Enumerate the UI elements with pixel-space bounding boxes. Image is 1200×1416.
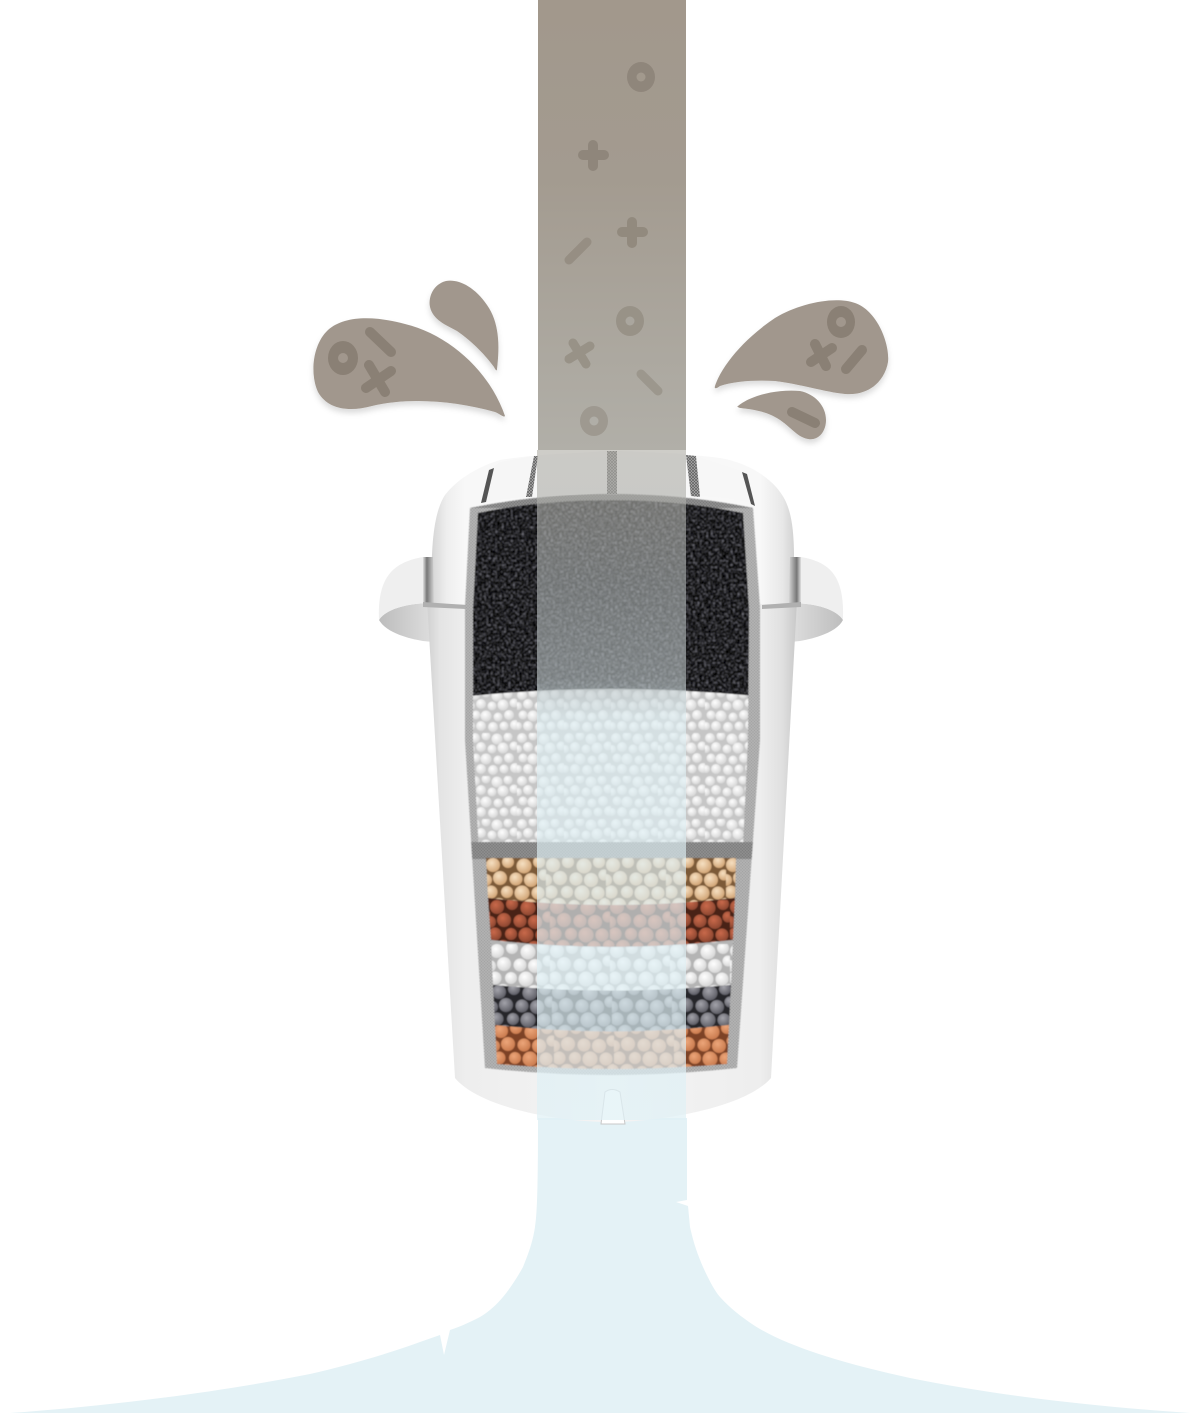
layer: white beads [491,940,733,990]
layer: orange beads [495,1025,729,1069]
incoming water overlay through cartridge [537,450,686,1120]
icon: minus contaminant [370,332,391,352]
splash: left large droplet [313,318,505,417]
icon: minus [569,242,587,260]
layer: activated carbon [470,500,755,700]
icon: ring [616,306,644,336]
icon: cross [569,343,590,364]
bottom notch [601,1090,625,1124]
splash: right large droplet [715,300,888,394]
splash: left small droplet [430,281,498,370]
icon: cross contaminant [811,344,832,366]
icon: ring contaminant [827,306,855,338]
mesh separator [470,842,755,859]
layer: grey beads [493,985,731,1032]
layer: red-brown beads [488,898,735,947]
filter cartridge [379,451,843,1124]
icon: plus [622,222,643,243]
cutaway window [460,490,765,1075]
icon: cross contaminant [366,365,391,392]
flange ring [379,557,843,642]
cartridge dome cap [432,452,794,604]
layer: tan beads [486,858,736,905]
outflow: clean water spreading [10,1118,1190,1413]
icon: ring [627,62,655,92]
flange notches [423,557,801,609]
layer: white ceramic beads [470,689,755,846]
cap ribs [481,451,755,506]
icon: minus contaminant [792,412,815,423]
icon: plus [583,145,604,166]
icon: ring [580,406,608,436]
icon: minus contaminant [846,350,862,369]
cartridge body [427,600,797,1122]
incoming dirty water stream [538,0,686,450]
icon: ring contaminant [328,341,358,375]
icon: minus [641,374,658,391]
splash: right small droplet [737,391,826,439]
